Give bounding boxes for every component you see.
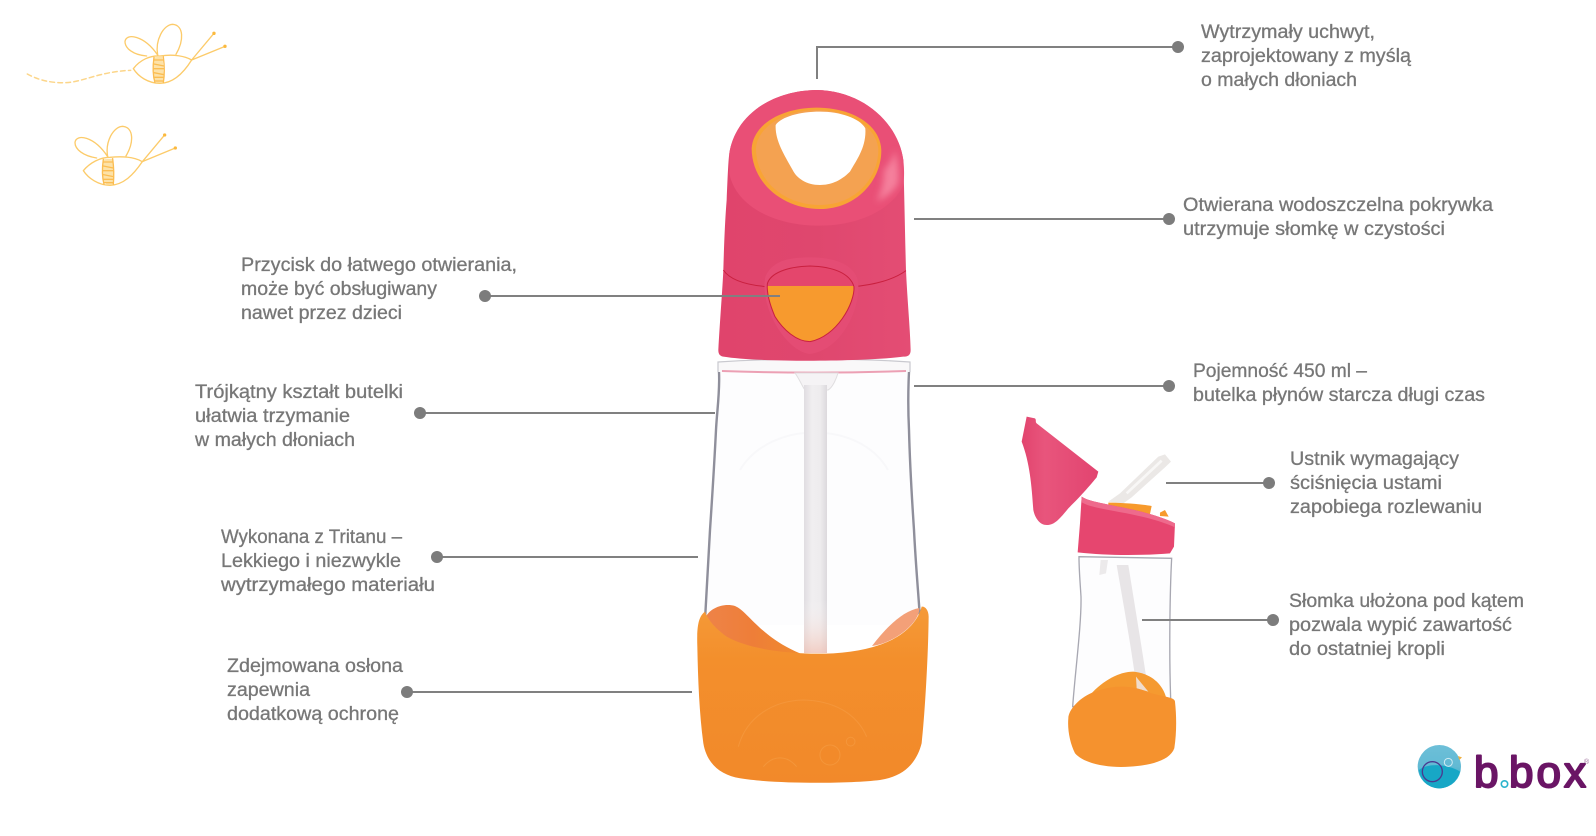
- handle bevel: [729, 90, 904, 226]
- main bottle: [697, 90, 929, 783]
- callout: lid: [914, 195, 1493, 240]
- text: angled straw: pozwala wypić zawartość: [1289, 615, 1512, 636]
- text: tritan: wytrzymałego materiału: [220, 575, 435, 596]
- connector: triangular shape: [420, 412, 715, 414]
- connector: handle: [817, 47, 1178, 79]
- decorative bee two: [75, 126, 177, 185]
- bottle glass body: [705, 359, 921, 625]
- text: handle: Wytrzymały uchwyt,: [1201, 22, 1375, 43]
- connector: lid: [914, 218, 1169, 220]
- decorative bee with dotted trail: [27, 24, 227, 83]
- cap seam: [723, 270, 906, 287]
- text: sleeve: zapewnia: [227, 680, 310, 701]
- callout: angled straw: [1142, 591, 1524, 660]
- callout: triangular shape: [194, 382, 715, 451]
- push button: [766, 266, 854, 342]
- dot: triangular shape: [414, 407, 426, 419]
- text: mouthpiece: zapobiega rozlewaniu: [1290, 497, 1482, 518]
- text: mouthpiece: Ustnik wymagający: [1290, 449, 1460, 470]
- open lid: [1022, 417, 1098, 525]
- mouthpiece straw: [1108, 454, 1171, 503]
- handle opening: [776, 112, 865, 185]
- straw: [795, 373, 838, 653]
- orange inner parts: [1108, 503, 1152, 514]
- text: triangular shape: w małych dłoniach: [194, 430, 355, 451]
- text: button: [241, 255, 517, 324]
- small bottle with open lid: [1022, 417, 1176, 767]
- text: triangular shape: ułatwia trzymanie: [195, 406, 350, 427]
- text: sleeve: [227, 656, 403, 725]
- text: angled straw: do ostatniej kropli: [1289, 639, 1445, 660]
- dot: sleeve: [401, 686, 413, 698]
- small bottle glass body: [1073, 557, 1172, 707]
- text: lid: Otwierana wodoszczelna pokrywka: [1183, 195, 1493, 216]
- dot: tritan: [431, 551, 443, 563]
- orange handle ring: [752, 108, 881, 209]
- logo dot: [1501, 781, 1508, 787]
- callout: mouthpiece: [1166, 449, 1482, 518]
- callout: sleeve: [227, 656, 692, 725]
- dotted flight trail: [27, 70, 131, 83]
- callout: button: [241, 255, 780, 324]
- callouts: [194, 22, 1524, 725]
- connector: tritan: [437, 556, 698, 558]
- text: lid: [1183, 195, 1493, 240]
- connector: mouthpiece: [1166, 482, 1269, 484]
- sleeve front: [697, 607, 929, 783]
- dot: capacity: [1163, 380, 1175, 392]
- callout: capacity: [914, 361, 1485, 406]
- connector: capacity: [914, 385, 1169, 387]
- text: mouthpiece: [1290, 449, 1482, 518]
- text: capacity: Pojemność 450 ml –: [1193, 361, 1367, 382]
- cap shell: [718, 90, 911, 361]
- bee one: [125, 24, 227, 83]
- dot: lid: [1163, 213, 1175, 225]
- logo wordmark: b: [1474, 748, 1498, 797]
- text: handle: zaprojektowany z myślą: [1201, 46, 1411, 67]
- lid collar: [1078, 497, 1175, 555]
- callout: tritan: [220, 527, 698, 596]
- small bottle inner straw: [1117, 565, 1148, 692]
- text: triangular shape: [194, 382, 403, 451]
- text: capacity: [1193, 361, 1485, 406]
- connector: angled straw: [1142, 619, 1273, 621]
- text: lid: utrzymuje słomkę w czystości: [1183, 219, 1445, 240]
- embossed logo: [738, 700, 867, 767]
- text: handle: [1201, 22, 1411, 91]
- dot: handle: [1172, 41, 1184, 53]
- connector: sleeve: [407, 691, 692, 693]
- registered mark: ®: [1584, 758, 1590, 766]
- text: angled straw: [1289, 591, 1524, 660]
- push button surround: [764, 257, 858, 354]
- text: button: może być obsługiwany: [241, 279, 438, 300]
- sleeve back: [1090, 672, 1167, 700]
- connector: button: [485, 295, 780, 297]
- text: angled straw: Słomka ułożona pod kątem: [1289, 591, 1524, 612]
- dot: mouthpiece: [1263, 477, 1275, 489]
- text: sleeve: Zdejmowana osłona: [227, 656, 403, 677]
- logo wordmark end: box: [1509, 748, 1586, 797]
- text: mouthpiece: ściśnięcia ustami: [1290, 473, 1442, 494]
- dot: button: [479, 290, 491, 302]
- text: sleeve: dodatkową ochronę: [227, 704, 399, 725]
- text: button: Przycisk do łatwego otwierania,: [241, 255, 517, 276]
- bottle cap with handle: [718, 90, 911, 361]
- callout: handle: [817, 22, 1411, 91]
- logo icon: [1418, 745, 1462, 788]
- text: triangular shape: Trójkątny kształt butelki: [195, 382, 403, 403]
- text: tritan: Wykonana z Tritanu –: [221, 527, 402, 548]
- sleeve inner left: [706, 605, 800, 654]
- silicone sleeve: [697, 605, 929, 783]
- dot: angled straw: [1267, 614, 1279, 626]
- logo: b.box: [1418, 745, 1590, 797]
- text: capacity: butelka płynów starcza długi czas: [1193, 385, 1485, 406]
- sleeve front: [1068, 687, 1176, 767]
- text: tritan: Lekkiego i niezwykle: [221, 551, 401, 572]
- text: tritan: [220, 527, 435, 596]
- text: button: nawet przez dzieci: [241, 303, 402, 324]
- sleeve inner right: [872, 608, 919, 646]
- text: handle: o małych dłoniach: [1201, 70, 1357, 91]
